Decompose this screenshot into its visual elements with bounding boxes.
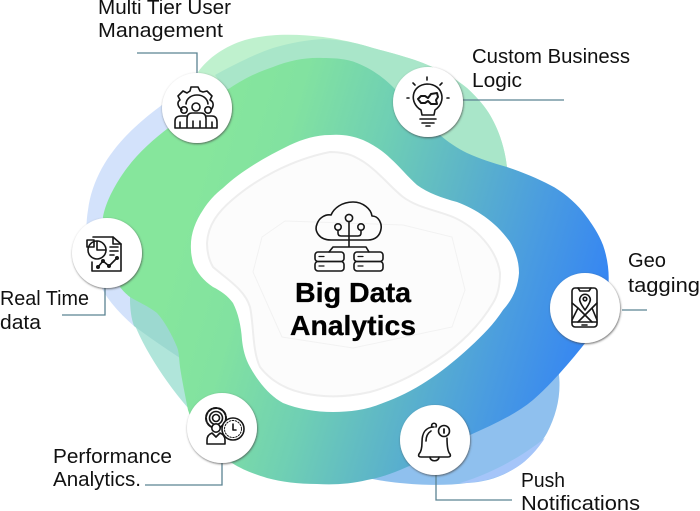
title: Analytics	[290, 310, 416, 341]
icon: gear with team	[175, 87, 217, 128]
background layer: periwinkle sliver bottom right	[460, 438, 545, 483]
item: Geo tagging	[550, 250, 700, 343]
item: Performance Analytics	[53, 393, 257, 491]
background blob: blue bottom right	[367, 368, 560, 485]
item: Real Time data	[0, 218, 142, 334]
central blob inner ring	[207, 152, 500, 396]
background blob: pale teal lower left	[130, 297, 200, 408]
background layer: green top	[215, 39, 507, 170]
main gradient blob	[103, 58, 609, 484]
title	[290, 277, 416, 341]
item: Multi Tier User Management	[98, 0, 232, 143]
icon: report with pie chart	[87, 237, 121, 271]
central faint polygon outline	[253, 221, 465, 348]
item: Geo tagging: tagging	[628, 275, 700, 297]
item: Geo tagging: Geo	[628, 250, 666, 272]
background blob: pale green top	[198, 35, 507, 170]
background layer: teal overlap lower left	[130, 297, 190, 358]
title: Big Data	[295, 277, 411, 308]
icon: notification bell	[419, 423, 450, 461]
central white blob	[191, 135, 519, 412]
item: Real Time data: Real Time	[0, 288, 89, 310]
background blob: light blue left	[86, 105, 260, 357]
item: Push Notifications: Push	[521, 470, 565, 492]
center icon: cloud with data servers	[315, 202, 383, 271]
item: Performance Analytics: Performance	[53, 446, 172, 468]
item: Custom Business Logic: Custom Business	[472, 46, 630, 68]
icon: person with gear and clock	[206, 408, 244, 444]
item: Push Notifications	[400, 405, 640, 511]
item: Custom Business Logic: Logic	[472, 70, 522, 92]
item: Custom Business Logic	[393, 46, 630, 137]
item: Multi Tier User Management: Management	[98, 20, 223, 42]
icon: phone with location pin	[572, 288, 597, 327]
item: Performance Analytics: Analytics.	[53, 469, 141, 491]
icon: lightbulb with puzzle	[407, 77, 449, 126]
item: Real Time data: data	[0, 312, 42, 334]
